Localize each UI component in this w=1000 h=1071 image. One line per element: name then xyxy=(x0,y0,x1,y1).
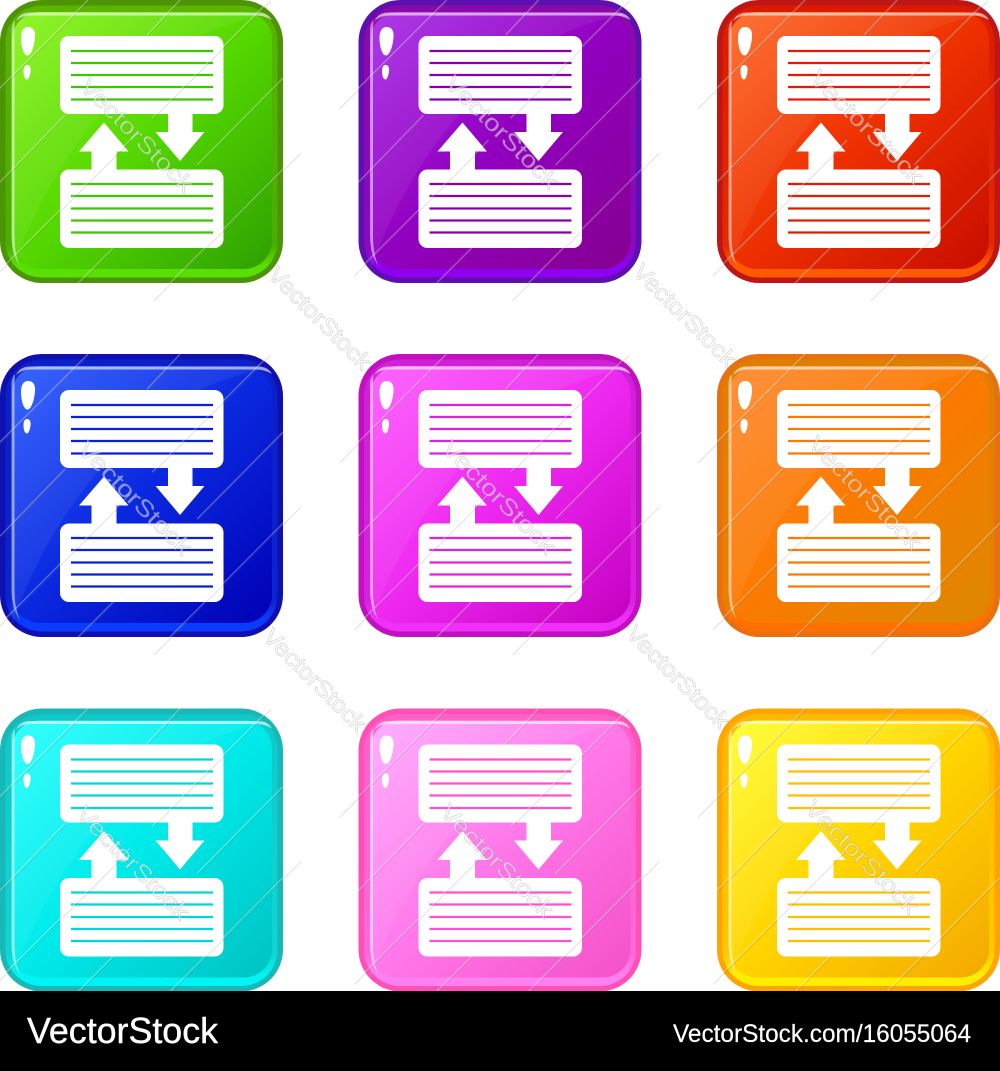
arrow up xyxy=(79,831,128,880)
bottom text box xyxy=(60,170,224,248)
gloss drops xyxy=(380,381,394,434)
arrow up xyxy=(79,476,128,525)
top text box xyxy=(60,36,224,114)
watermark text: VectorStock xyxy=(71,801,196,926)
top text box xyxy=(777,36,940,114)
button body xyxy=(0,0,283,283)
bottom text box xyxy=(777,524,940,602)
button body xyxy=(717,708,1000,992)
icon tile: blue xyxy=(0,354,283,637)
gloss drops xyxy=(380,27,394,80)
bottom text box xyxy=(418,170,582,248)
button body xyxy=(358,0,642,283)
arrow up xyxy=(796,476,846,525)
arrow down xyxy=(156,822,204,870)
arrow up xyxy=(438,476,487,525)
top text box xyxy=(418,390,582,468)
watermark text: VectorStock xyxy=(258,623,372,737)
watermark text: VectorStock xyxy=(75,73,200,198)
top text box xyxy=(777,390,940,468)
watermark text: VectorStock xyxy=(73,436,198,561)
bottom text box xyxy=(60,878,224,956)
bottom text box xyxy=(418,878,582,956)
gloss drops xyxy=(380,736,394,788)
arrow down xyxy=(156,467,204,515)
bottom text box xyxy=(418,524,582,602)
button body xyxy=(0,354,283,637)
gloss drops xyxy=(738,27,752,80)
gloss drops xyxy=(738,381,752,434)
watermark text: VectorStock xyxy=(621,620,735,734)
top text box xyxy=(418,744,582,822)
watermark text: VectorStock xyxy=(800,795,925,920)
arrow up xyxy=(796,831,846,880)
arrow up xyxy=(438,831,487,880)
button body xyxy=(717,0,1000,283)
button body xyxy=(0,708,283,992)
bottom text box xyxy=(60,524,224,602)
arrow up xyxy=(438,122,487,171)
top text box xyxy=(777,744,940,822)
button body xyxy=(717,354,1000,637)
icon tile: red xyxy=(717,0,1000,283)
top text box xyxy=(60,744,224,822)
top text box xyxy=(418,36,582,114)
arrow down xyxy=(156,113,204,161)
icon tile: magenta xyxy=(358,354,642,637)
icon tile: purple xyxy=(358,0,642,283)
arrow down xyxy=(514,467,563,515)
bottom text box xyxy=(777,170,940,248)
gloss drops xyxy=(21,736,35,788)
arrow down xyxy=(872,113,922,161)
button body xyxy=(358,708,642,992)
icon tile: orange xyxy=(717,354,1000,637)
footer bar xyxy=(0,991,1000,1071)
icon tile: cyan xyxy=(0,708,283,992)
watermark text: VectorStock xyxy=(803,431,928,556)
arrow down xyxy=(514,113,563,161)
gloss drops xyxy=(738,736,752,788)
watermark text: VectorStock xyxy=(628,258,742,372)
arrow down xyxy=(514,822,563,870)
arrow down xyxy=(872,822,922,870)
watermark text: VectorStock xyxy=(435,799,560,924)
arrow up xyxy=(79,122,128,171)
bottom text box xyxy=(777,878,940,956)
watermark text: VectorStock xyxy=(440,70,565,195)
watermark text: VectorStock xyxy=(805,65,930,190)
gloss drops xyxy=(21,381,35,434)
icon tile: pink xyxy=(358,708,642,992)
footer image id: VectorStock.com/16055064 xyxy=(673,1020,971,1048)
button body xyxy=(358,354,642,637)
watermark text: VectorStock xyxy=(437,435,562,560)
footer brand: VectorStock xyxy=(27,1010,219,1051)
icon tile: green xyxy=(0,0,283,283)
gloss drops xyxy=(21,27,35,80)
watermark text: VectorStock xyxy=(263,261,377,375)
watermark text xyxy=(71,65,930,926)
arrow down xyxy=(872,467,922,515)
top text box xyxy=(60,390,224,468)
arrow up xyxy=(796,122,846,171)
icon tile: yellow xyxy=(717,708,1000,992)
